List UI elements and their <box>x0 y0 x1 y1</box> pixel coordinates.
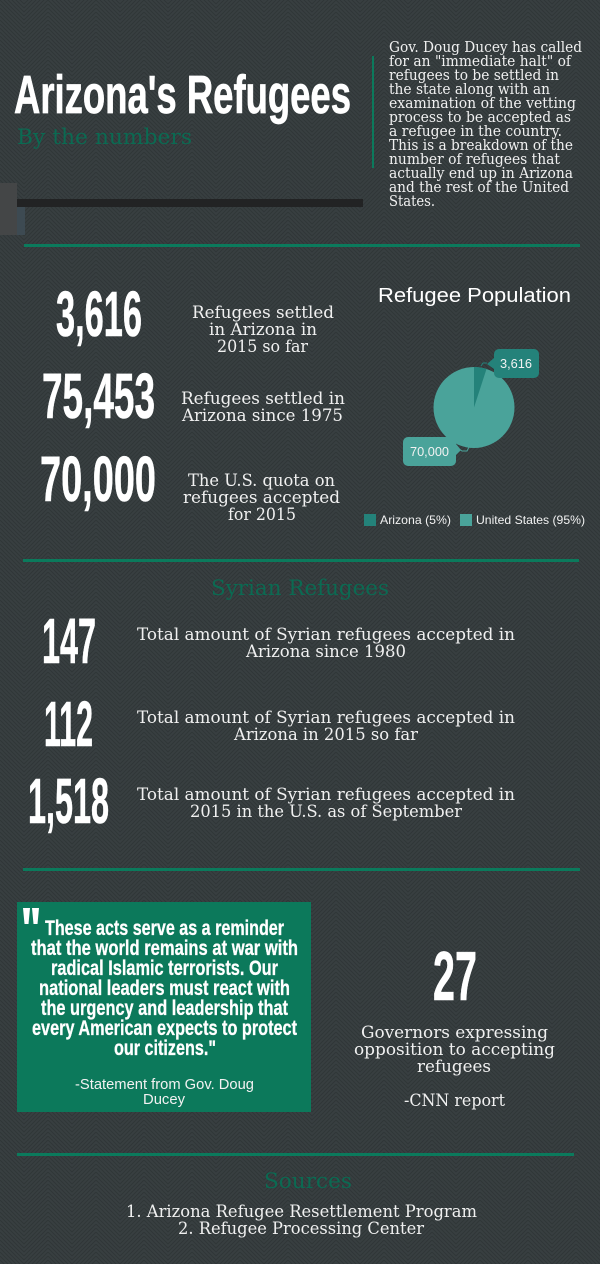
stat: 147: Total amount of Syrian refugees accepted in <box>137 625 515 645</box>
stat: 1,518: 2015 in the U.S. as of September <box>190 802 463 822</box>
callout: 3,616 <box>481 349 539 378</box>
callout: 3,616: 3,616 <box>500 356 532 371</box>
stat: 75,453: Arizona since 1975 <box>181 406 343 426</box>
title: Arizona's Refugees <box>14 65 351 125</box>
intro paragraph: Gov. Doug Ducey has called <box>389 38 582 56</box>
stat: 70,000: The U.S. quota on <box>188 471 335 491</box>
intro paragraph: the state along with an <box>389 80 550 98</box>
governors caption: opposition to accepting <box>354 1040 555 1060</box>
quote text: our citizens." <box>114 1036 216 1060</box>
quote text: radical Islamic terrorists. Our <box>51 956 278 980</box>
stat: 3,616: 2015 so far <box>217 337 309 357</box>
header divider line <box>372 56 374 168</box>
quote attribution: Ducey <box>143 1092 186 1108</box>
quote attribution: -Statement from Gov. Doug <box>75 1077 254 1093</box>
stat: 112: Total amount of Syrian refugees accepted in <box>137 708 515 728</box>
intro paragraph: States. <box>389 192 435 210</box>
quote attribution <box>75 1077 254 1108</box>
icon: quotation mark <box>23 908 39 924</box>
governors caption: Governors expressing <box>361 1023 548 1043</box>
intro paragraph: for an "immediate halt" of <box>389 52 572 70</box>
stat: 147: Arizona since 1980 <box>245 642 406 662</box>
decorative bar and blocks <box>0 183 363 235</box>
stat: 112 <box>44 688 515 760</box>
sources heading: Sources <box>264 1169 352 1193</box>
stat: 147 <box>42 605 515 677</box>
pie chart <box>434 367 514 448</box>
quote text: the urgency and leadership that <box>41 996 288 1020</box>
intro paragraph: actually end up in Arizona <box>389 164 573 182</box>
panel: sources <box>126 1169 477 1239</box>
stat: 75,453: 75,453 <box>42 360 155 432</box>
stat: 70,000: 70,000 <box>40 443 156 515</box>
legend: Arizona (5%) <box>380 513 451 527</box>
sources list: 2. Refugee Processing Center <box>178 1219 425 1239</box>
stat: 112: Arizona in 2015 so far <box>233 725 419 745</box>
stat: 3,616 <box>56 278 334 357</box>
governors caption: -CNN report <box>404 1091 505 1111</box>
stat: 1,518: Total amount of Syrian refugees accepted in <box>137 785 515 805</box>
sources list <box>126 1202 477 1239</box>
stat: 70,000: for 2015 <box>228 505 296 525</box>
stat: 70,000: refugees accepted <box>183 488 340 508</box>
stat: 112: 112 <box>44 688 93 760</box>
panel: Arizona statistics <box>40 278 345 525</box>
intro paragraph: process to be accepted as <box>389 108 571 126</box>
legend <box>364 513 585 527</box>
quote text: national leaders must react with <box>39 976 290 1000</box>
stat: 70,000 <box>40 443 340 525</box>
governors caption <box>354 1023 555 1111</box>
intro paragraph: refugees to be settled in <box>389 66 559 84</box>
quote text: These acts serve as a reminder <box>45 916 284 940</box>
panel: Refugee Population pie chart <box>364 285 585 527</box>
stat: 147: 147 <box>42 605 96 677</box>
quote text <box>31 916 298 1060</box>
governors caption: refugees <box>417 1057 491 1077</box>
intro paragraph <box>389 38 582 210</box>
quote background <box>17 902 311 1112</box>
stat: 75,453 <box>42 360 345 432</box>
sources list: 1. Arizona Refugee Resettlement Program <box>126 1202 477 1222</box>
number: 27: 27 <box>433 937 477 1015</box>
panel: Syrian refugees <box>28 576 515 837</box>
callout: 70,000: 70,000 <box>410 444 449 459</box>
header panel <box>0 38 582 235</box>
panel: governors stat <box>354 937 555 1111</box>
intro paragraph: examination of the vetting <box>389 94 576 112</box>
legend: United States (95%) <box>476 513 585 527</box>
section heading: Syrian Refugees <box>211 576 389 600</box>
stat: 75,453: Refugees settled in <box>181 389 345 409</box>
stat: 3,616: Refugees settled <box>192 303 334 323</box>
stat: 3,616: in Arizona in <box>209 320 317 340</box>
intro paragraph: and the rest of the United <box>389 178 569 196</box>
quote text: that the world remains at war with <box>31 936 298 960</box>
panel: quote <box>17 902 311 1112</box>
intro paragraph: a refugee in the country. <box>389 122 562 140</box>
intro paragraph: number of refugees that <box>389 150 560 168</box>
intro paragraph: This is a breakdown of the <box>389 136 573 154</box>
chart title: Refugee Population <box>378 285 571 307</box>
stat: 1,518 <box>28 765 515 837</box>
stat: 3,616: 3,616 <box>56 278 142 350</box>
subtitle: By the numbers <box>17 125 192 149</box>
callout: 70,000 <box>403 437 469 466</box>
stat: 1,518: 1,518 <box>28 765 109 837</box>
quote text: every American expects to protect <box>32 1016 297 1040</box>
